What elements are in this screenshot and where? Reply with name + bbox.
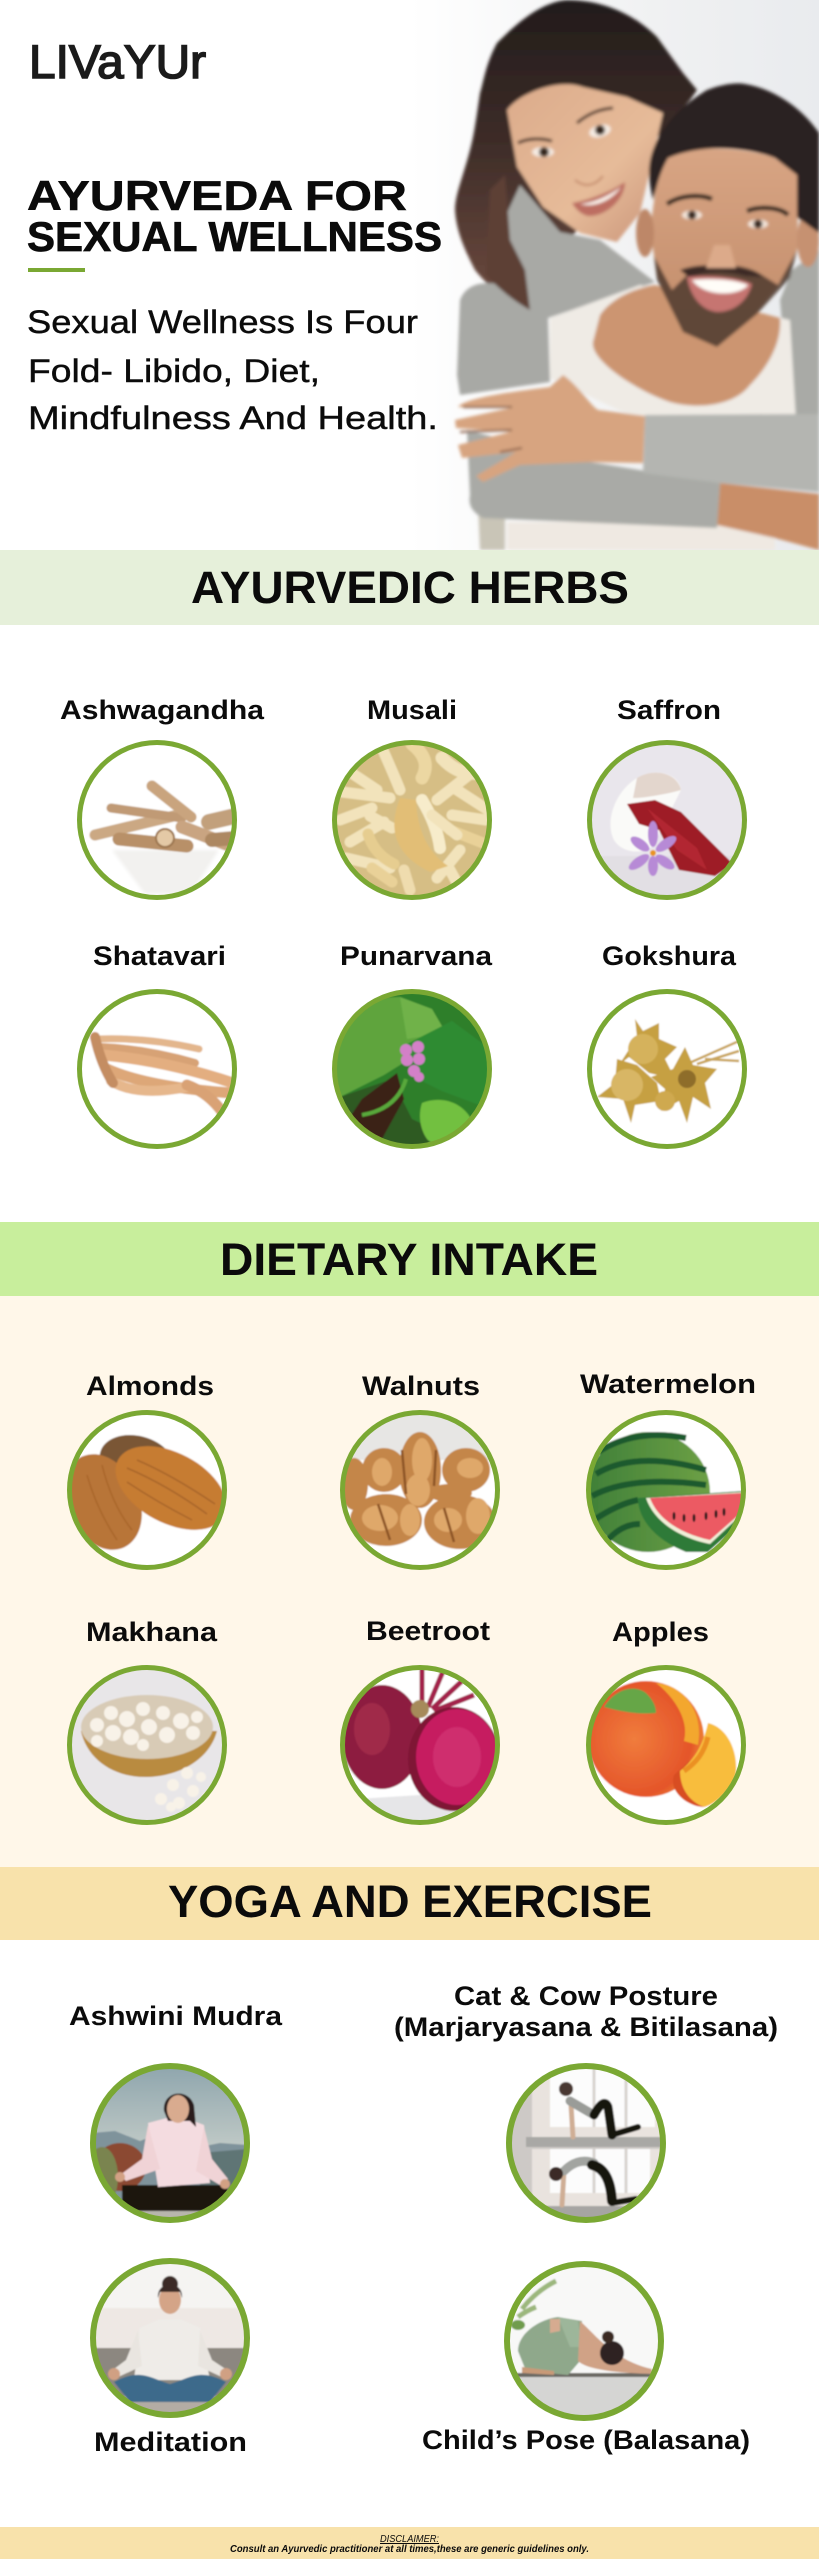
item: Shatavari: Shatavari [93, 941, 226, 971]
item: Almonds: Almonds [86, 1371, 214, 1401]
item: Saffron: Saffron [617, 695, 721, 725]
item: Child's Pose [422, 2263, 750, 2455]
section header: dietary intake: DIETARY INTAKE [220, 1234, 598, 1285]
footer disclaimer: Consult an Ayurvedic practitioner at all times,these are generic guidelines only. [230, 2544, 589, 2555]
footer disclaimer [0, 2527, 819, 2559]
item: Apples [588, 1617, 744, 1823]
hero photo: couple [455, 0, 819, 550]
item: Cat & Cow Posture: (Marjaryasana & Bitilasana) [394, 2012, 778, 2042]
section header: ayurvedic herbs: AYURVEDIC HERBS [191, 562, 629, 613]
hero background [0, 0, 819, 550]
item: Ashwini Mudra [69, 2001, 283, 2223]
item: Child's Pose: Child’s Pose (Balasana) [422, 2425, 750, 2455]
item: Gokshura: Gokshura [602, 941, 737, 971]
section header: dietary intake [0, 1222, 819, 1296]
item: Walnuts [340, 1371, 498, 1568]
dietary background [0, 1296, 819, 1867]
panel: yoga [69, 1981, 778, 2457]
item: Almonds [67, 1376, 227, 1570]
item: Makhana [69, 1617, 225, 1823]
item: Meditation [90, 2260, 250, 2457]
item: Watermelon: Watermelon [580, 1369, 756, 1399]
item: Beetroot [342, 1616, 500, 1823]
item: Watermelon [580, 1369, 756, 1568]
item: Punarvana: Punarvana [340, 941, 493, 971]
section header: yoga and exercise: YOGA AND EXERCISE [168, 1876, 652, 1927]
green rule [28, 268, 85, 272]
item: Cat & Cow Posture [394, 1981, 778, 2222]
item: Shatavari [79, 941, 235, 1147]
item: Ashwagandha [60, 695, 265, 898]
item: Cat & Cow Posture: Cat & Cow Posture [454, 1981, 718, 2011]
item: Ashwagandha: Ashwagandha [60, 695, 265, 725]
panel: dietary items [0, 1296, 819, 1867]
item: Saffron [589, 695, 745, 898]
panel: hero [0, 0, 819, 550]
footer disclaimer: DISCLAIMER: [380, 2534, 439, 2545]
title [27, 172, 442, 260]
subtitle: Fold- Libido, Diet, [28, 353, 320, 389]
item: Walnuts: Walnuts [362, 1371, 480, 1401]
subtitle [27, 304, 438, 436]
item: Musali [334, 695, 490, 898]
item: Punarvana [334, 941, 493, 1147]
subtitle: Sexual Wellness Is Four [27, 304, 418, 340]
logo: LIVaYUr [29, 35, 206, 88]
item: Beetroot: Beetroot [366, 1616, 490, 1646]
panel: herbs [60, 695, 745, 1147]
subtitle: Mindfulness And Health. [28, 400, 438, 436]
item: Gokshura [589, 941, 745, 1147]
item: Musali: Musali [367, 695, 457, 725]
item: Ashwini Mudra: Ashwini Mudra [69, 2001, 283, 2031]
item: Apples: Apples [612, 1617, 709, 1647]
section header: yoga and exercise [0, 1867, 819, 1940]
title: AYURVEDA FOR [27, 172, 407, 219]
title: SEXUAL WELLNESS [27, 213, 442, 260]
item: Meditation: Meditation [94, 2427, 247, 2457]
section header: ayurvedic herbs [0, 550, 819, 625]
item: Makhana: Makhana [86, 1617, 218, 1647]
